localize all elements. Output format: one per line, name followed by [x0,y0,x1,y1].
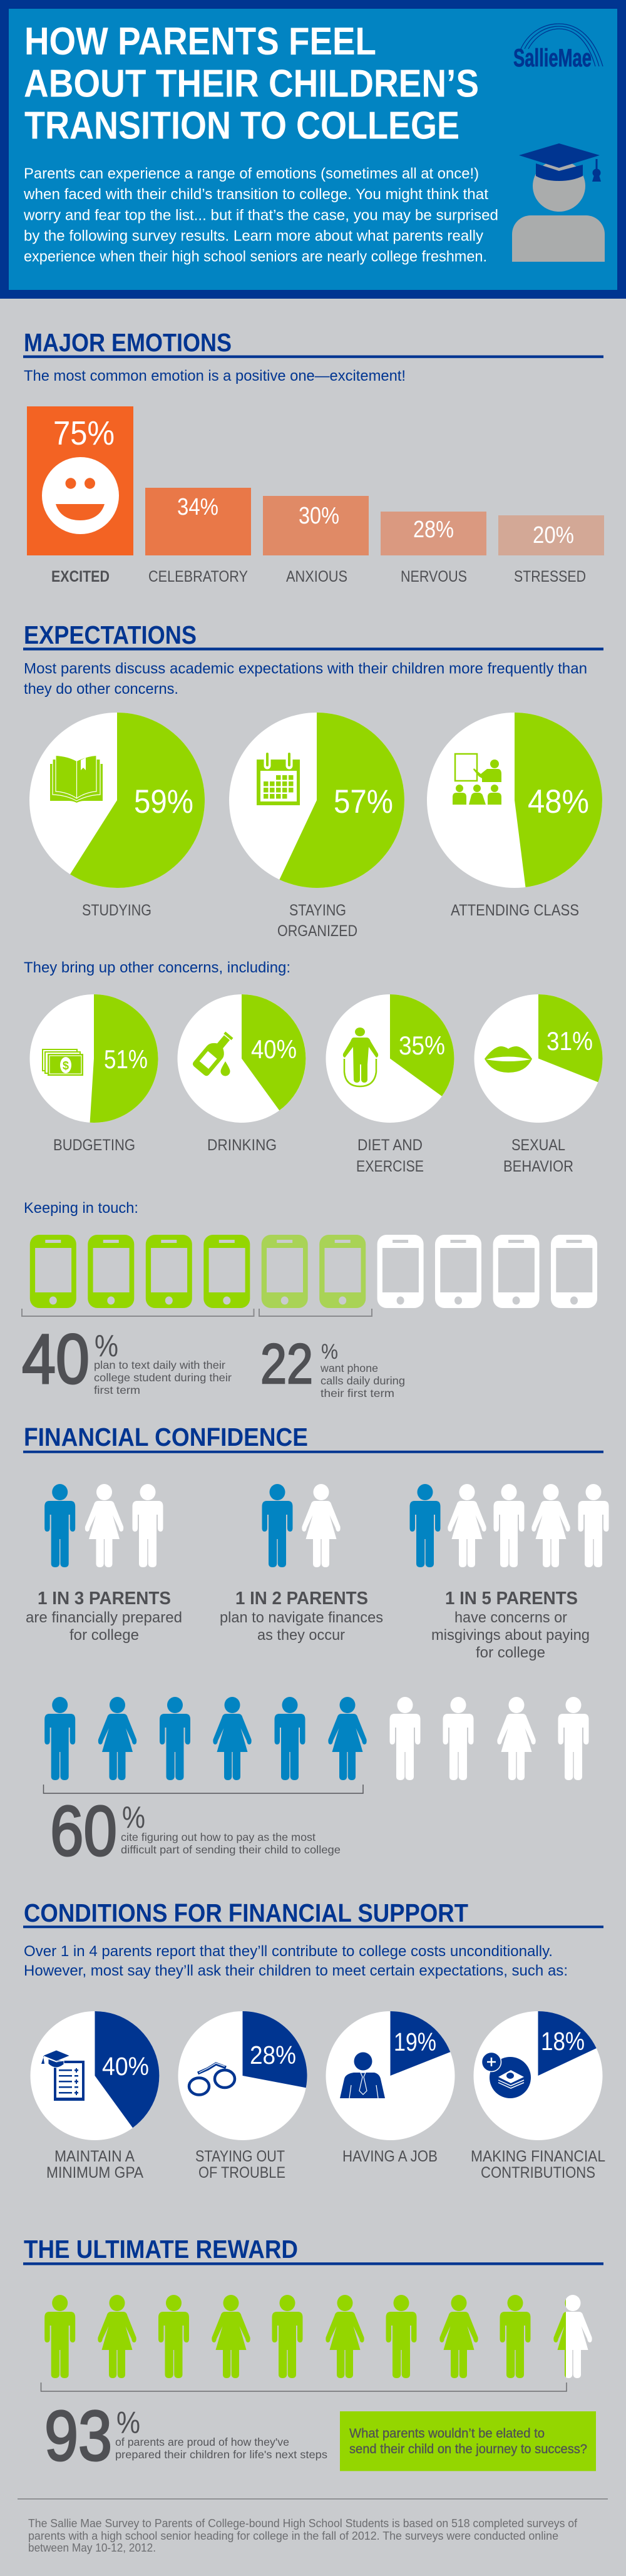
bar: excited 75% [27,406,133,555]
heading: CONDITIONS FOR FINANCIAL SUPPORT [24,1899,468,1927]
bar labels: NERVOUS [401,568,467,585]
stat: 22 percent: % [321,1340,338,1364]
label: ORGANIZED [277,922,357,940]
bar labels: ANXIOUS [286,568,347,585]
stat: 1 in 5 parents: misgivings about paying [431,1627,590,1644]
icon: lips [485,1046,532,1073]
icon: money [43,1049,83,1076]
stat: 60 percent: difficult part of sending their child to college [121,1843,341,1856]
bracket: 22 percent [259,1309,372,1316]
stat: 1 in 2 parents: as they occur [257,1627,345,1644]
bar: nervous 28%: 28% [413,517,454,543]
bar: anxious 30%: 30% [299,503,339,529]
footnote: between May 10-12, 2012. [28,2542,156,2554]
label: STAYING [289,902,346,919]
stat: 60 percent: % [122,1801,145,1835]
pie: having a job 19%: 19% [394,2027,436,2056]
stat: 22 percent: want phone [320,1362,378,1374]
intro text [24,1943,568,1979]
intro text: Over 1 in 4 parents report that they’ll contribute to college costs unconditionally. [24,1943,553,1960]
pie: attending class 48%: 48% [528,783,589,820]
pie: making financial contributions 18%: 18% [541,2027,585,2056]
stat: 1 in 5 parents [431,1589,590,1661]
intro paragraph: by the following survey results. Learn more about what parents really [24,228,483,244]
pie: staying organized 57%: 57% [334,783,393,820]
icon: handcuffs [189,2063,235,2095]
figures: 1 in 3 [44,1484,163,1567]
section: conditions for financial support [23,1899,605,2182]
label: CONTRIBUTIONS [481,2164,595,2182]
heading: FINANCIAL CONFIDENCE [24,1423,308,1451]
bar labels: STRESSED [514,568,586,585]
intro paragraph [23,165,498,265]
icon: grade report [41,2050,85,2101]
intro text [24,661,587,698]
label: BEHAVIOR [503,1158,573,1175]
stat: 60 percent [50,1791,341,1870]
bar: nervous 28% [381,512,486,555]
label: HAVING A JOB [342,2148,438,2165]
label [277,902,357,940]
label: OF TROUBLE [198,2164,285,2182]
icon: money: $ [63,1059,69,1072]
pie: diet and exercise 35%: 35% [399,1031,445,1060]
bar: stressed 20%: 20% [533,522,574,549]
stat: 1 in 3 parents: 1 IN 3 PARENTS [38,1589,171,1609]
stat: 93 percent [44,2396,327,2475]
bar: celebratory 34% [145,488,251,555]
callout: send their child on the journey to success? [349,2442,587,2456]
figures: row of ten [44,2295,592,2378]
stat: 1 in 3 parents [26,1589,182,1644]
keeping in touch text: Keeping in touch: [24,1200,138,1217]
bar: anxious 30% [263,496,369,555]
bracket: 93 percent [41,2383,567,2391]
stat: 1 in 2 parents: plan to navigate finances [220,1609,383,1626]
figures: 1 in 2 [262,1484,341,1567]
icon: jump rope [343,1028,378,1086]
label [46,2148,143,2182]
label: MINIMUM GPA [46,2164,143,2182]
label: STUDYING [82,902,151,919]
stat: 1 in 5 parents: 1 IN 5 PARENTS [445,1589,578,1609]
pie: sexual behavior 31%: 31% [546,1026,593,1056]
stat: 40 percent: plan to text daily with their [94,1359,225,1371]
pie: drinking 40% [178,994,305,1154]
stat: 40 percent: college student during their [94,1371,232,1384]
stat: 22 percent: their first term [321,1387,394,1399]
title: HOW PARENTS FEEL [24,20,376,63]
bar chart [27,406,604,555]
label: MAKING FINANCIAL [471,2148,605,2165]
heading: EXPECTATIONS [24,621,197,649]
panel: header [0,0,626,299]
stat: 1 in 2 parents [220,1589,383,1644]
bar labels: CELEBRATORY [148,568,248,585]
icon: smiley [42,457,119,534]
stat: 93 percent: prepared their children for life's next steps [115,2448,327,2461]
stat: 40 percent: 40 [22,1320,90,1398]
callout: What parents wouldn’t be elated to [349,2426,545,2441]
icon: contribution [482,2053,531,2098]
icon: classroom [453,754,501,805]
logo: Sallie Mae [513,24,603,72]
pie: staying out of trouble 28% [178,2011,307,2182]
heading: MAJOR EMOTIONS [24,328,232,357]
title: ABOUT THEIR CHILDREN’S [24,63,479,105]
pie: budgeting 51%: 51% [104,1044,148,1074]
label: BUDGETING [53,1136,135,1154]
figures: 1 in 5 [409,1484,608,1567]
icon: bottle and drop [192,1028,237,1077]
stat: 60 percent: cite figuring out how to pay as the most [121,1831,316,1843]
bar: excited 75%: 75% [53,415,115,452]
section: major emotions [23,328,604,585]
pie: having a job 19% [326,2011,454,2165]
stat: 40 percent [22,1320,232,1398]
stat: 22 percent: calls daily during [321,1374,405,1387]
pie: staying organized 57% [229,713,404,940]
bracket: 60 percent [44,1785,363,1793]
footnote: parents with a high school senior heading for college in the fall of 2012. The surveys were conducted online [28,2530,558,2542]
bracket: 40 percent [22,1309,254,1316]
bar labels: EXCITED [51,568,110,585]
figures: row of ten [44,1697,588,1780]
icon: book [50,756,103,803]
intro paragraph: experience when their high school seniors are nearly college freshmen. [24,249,487,265]
intro paragraph: when faced with their child’s transition to college. You might think that [23,186,488,203]
stat: 40 percent: % [95,1329,118,1363]
stat: 1 in 5 parents: have concerns or [454,1609,567,1626]
stat: 93 percent: % [116,2406,140,2440]
label: DRINKING [207,1136,277,1154]
pie: diet and exercise 35% [326,994,454,1175]
label: MAINTAIN A [54,2148,135,2165]
section: the ultimate reward [23,2235,603,2475]
stat: 22 percent [260,1333,405,1399]
stat: 40 percent: first term [94,1384,140,1396]
stat: 22 percent: 22 [260,1333,313,1396]
icon: calendar [257,754,300,805]
stat: 1 in 3 parents: are financially prepared [26,1609,182,1626]
heading: THE ULTIMATE REWARD [24,2235,298,2264]
pie: making financial contributions 18% [471,2011,605,2182]
bar: celebratory 34%: 34% [177,494,218,520]
label: SEXUAL [511,1136,565,1154]
pie: sexual behavior 31% [475,994,602,1175]
stat: 93 percent: 93 [44,2396,112,2475]
icon: graduate [512,143,605,262]
pie: studying 59%: 59% [134,783,193,820]
label [356,1136,424,1175]
intro text: they do other concerns. [24,681,178,698]
label [471,2148,605,2182]
title: TRANSITION TO COLLEGE [24,104,459,148]
pie: drinking 40%: 40% [251,1034,297,1064]
icon: business person [340,2053,385,2098]
intro paragraph: worry and fear top the list... but if that’s the case, you may be surprised [23,207,498,224]
stat: 60 percent: 60 [50,1791,117,1870]
footnote: The Sallie Mae Survey to Parents of College-bound High School Students is based on 518 completed surveys of [28,2517,578,2530]
pie: budgeting 51% [30,994,158,1154]
pie: studying 59% [29,713,205,919]
intro text: The most common emotion is a positive one—excitement! [24,368,406,384]
bar: stressed 20% [498,515,604,555]
title [24,20,479,148]
label: EXERCISE [356,1158,424,1175]
pie: attending class 48% [427,713,602,919]
callout [340,2411,596,2471]
pie: maintain a minimum GPA 40%: 40% [102,2052,149,2081]
intro paragraph: Parents can experience a range of emotions (sometimes all at once!) [24,165,479,182]
logo: Sallie Mae: SallieMae [513,44,592,72]
icons: row of phones [30,1235,597,1308]
stat: 1 in 3 parents: for college [69,1627,139,1644]
bar labels [51,568,586,585]
section: financial confidence [23,1423,608,1870]
intro text: Most parents discuss academic expectations with their children more frequently than [24,661,587,677]
pie: staying out of trouble 28%: 28% [250,2041,296,2069]
intro text: However, most say they’ll ask their children to meet certain expectations, such as: [24,1962,568,1979]
footnote [28,2517,578,2554]
pie: maintain a minimum GPA 40% [30,2011,159,2182]
section: expectations [22,621,603,1399]
label [195,2148,285,2182]
label [503,1136,573,1175]
label: STAYING OUT [195,2148,285,2165]
label: DIET AND [357,1136,423,1154]
stat: 93 percent: of parents are proud of how they've [115,2436,289,2448]
other concerns text: They bring up other concerns, including: [24,959,290,976]
label: ATTENDING CLASS [451,902,579,919]
stat: 1 in 5 parents: for college [476,1644,545,1661]
stat: 1 in 2 parents: 1 IN 2 PARENTS [235,1589,368,1609]
